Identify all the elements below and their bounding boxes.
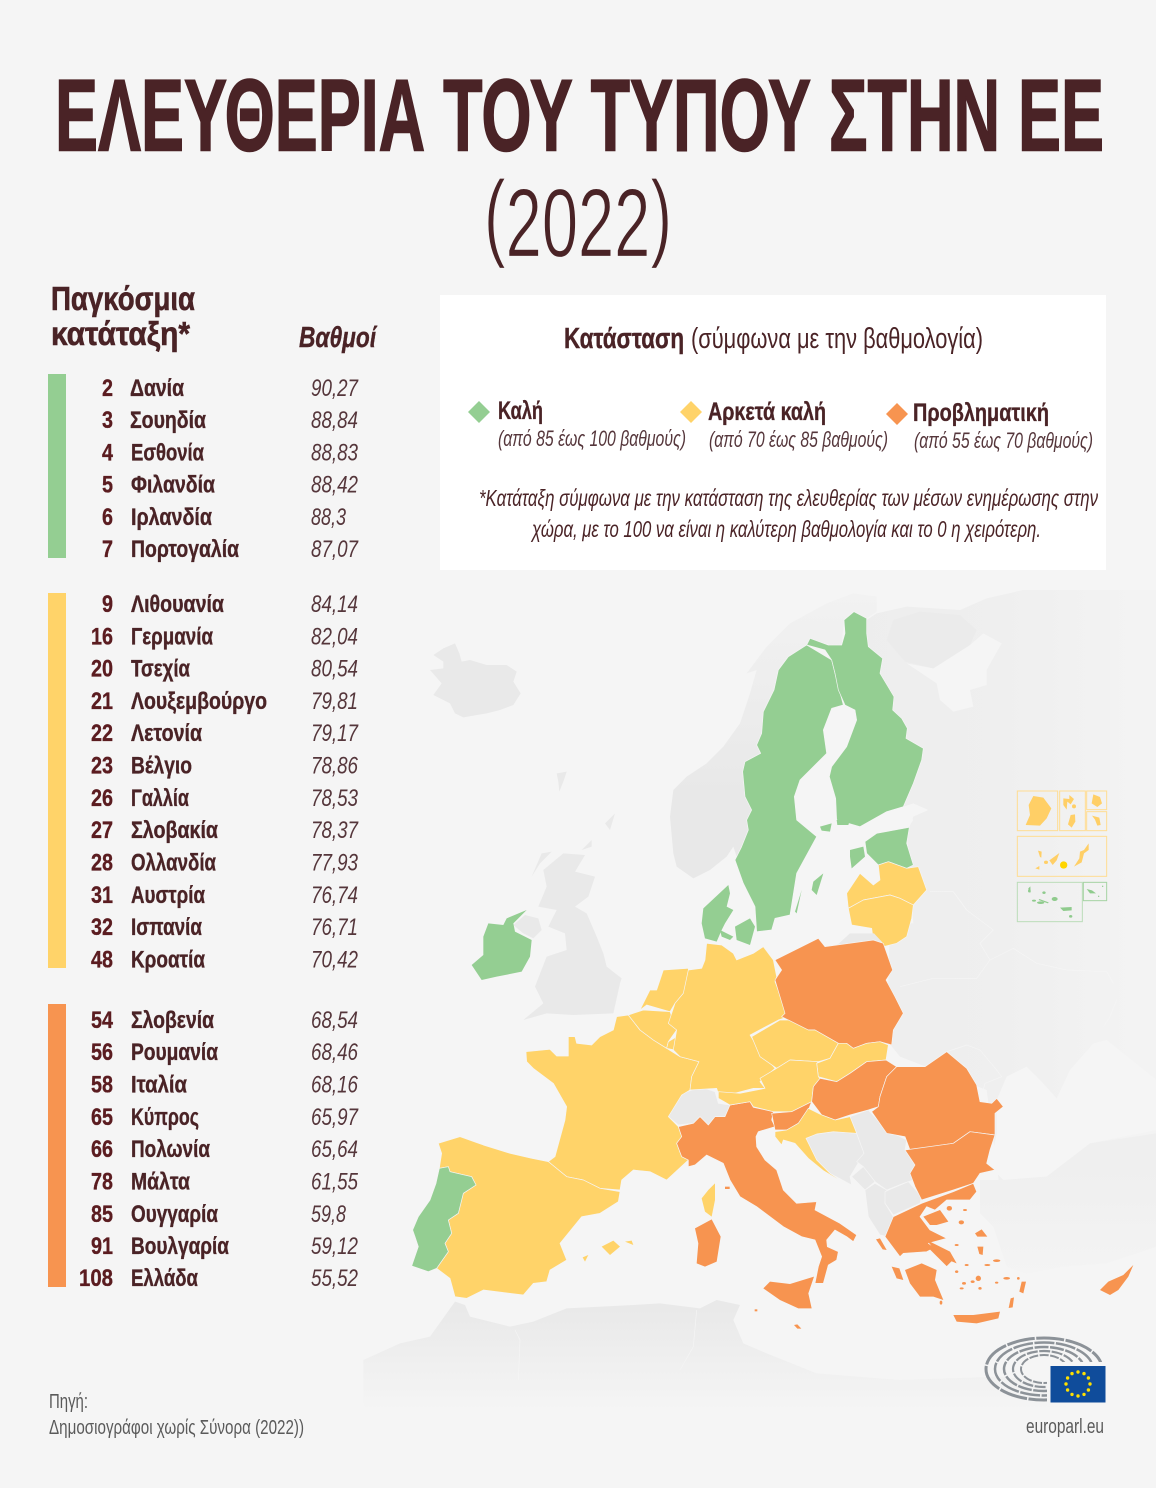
title bbox=[55, 58, 1104, 278]
legend heading bbox=[564, 323, 983, 355]
ranking group: fairly good: 22 bbox=[91, 720, 113, 747]
ranking group: fairly good: Λετονία bbox=[131, 720, 202, 747]
ranking group: fairly good bbox=[48, 591, 359, 974]
country: Spain bbox=[437, 1137, 620, 1298]
surrounding land: Black Sea and Turkey bbox=[947, 1000, 1156, 1273]
country: Corsica bbox=[702, 1183, 715, 1217]
legend item: fairly good: Αρκετά καλή bbox=[708, 398, 826, 426]
ranking group: good: 5 bbox=[102, 472, 113, 498]
ranking group: fairly good: 32 bbox=[91, 914, 113, 941]
ranking group: good: 3 bbox=[102, 407, 113, 434]
country: Romania bbox=[872, 1052, 1003, 1150]
ranking group: good: Ιρλανδία bbox=[131, 504, 212, 531]
inset: Canary Islands bbox=[1017, 836, 1107, 876]
country: Slovakia bbox=[817, 1042, 888, 1082]
island shapes yellow bbox=[1026, 794, 1102, 870]
ranking group: good bbox=[48, 374, 359, 563]
ranking group: fairly good: Λιθουανία bbox=[131, 591, 224, 618]
ranking group: problematic: 65,64 bbox=[311, 1136, 358, 1163]
Balearic Islands bbox=[583, 1241, 633, 1262]
ranking group: good: Δανία bbox=[130, 375, 184, 402]
island shapes green bbox=[1028, 886, 1103, 918]
legend item: fairly good bbox=[680, 398, 888, 452]
country: Malta bbox=[794, 1324, 801, 1329]
country: Finland bbox=[807, 612, 923, 827]
ranking group: fairly good: 70,42 bbox=[311, 946, 358, 974]
EU flag bbox=[1050, 1366, 1106, 1402]
country: Denmark bbox=[702, 885, 755, 945]
ranking group: good: Εσθονία bbox=[131, 440, 204, 466]
ranking group: good: 4 bbox=[102, 440, 114, 466]
ranking group: problematic: 65 bbox=[91, 1104, 113, 1131]
ranking group: good: 88,84 bbox=[311, 407, 358, 434]
ranking group: problematic: 78 bbox=[91, 1168, 113, 1196]
country: Sicily bbox=[763, 1277, 814, 1308]
ranking group: fairly good: 78,86 bbox=[311, 752, 359, 780]
country: Italy bbox=[677, 1102, 857, 1283]
ranking group: problematic: 85 bbox=[91, 1201, 113, 1228]
ranking group: good: 6 bbox=[102, 504, 113, 531]
ranking group: fairly good: Γερμανία bbox=[131, 624, 213, 650]
ranking group: problematic: Πολωνία bbox=[131, 1136, 210, 1163]
ranking group: problematic: 108 bbox=[79, 1265, 113, 1292]
legend item: fairly good: (από 70 έως 85 βαθμούς) bbox=[709, 427, 888, 452]
Kaliningrad bbox=[833, 933, 883, 947]
country: Croatia bbox=[775, 1108, 857, 1187]
map of Europe bbox=[363, 590, 1156, 1413]
country: Luxembourg bbox=[667, 1037, 678, 1051]
Italian small islands bbox=[725, 1187, 757, 1311]
ranking group: problematic: Σλοβενία bbox=[131, 1007, 214, 1034]
ranking group: good: 2 bbox=[102, 375, 113, 402]
ranking group: problematic: Ρουμανία bbox=[131, 1039, 218, 1066]
ranking group: good: Φιλανδία bbox=[131, 472, 215, 498]
country: Slovenia bbox=[772, 1102, 812, 1130]
ranking group: fairly good: Λουξεμβούργο bbox=[131, 688, 267, 715]
legend item: good bbox=[468, 397, 686, 451]
ranking group: fairly good: 82,04 bbox=[311, 624, 358, 650]
ranking group: fairly good: Βέλγιο bbox=[131, 752, 192, 780]
country: Latvia bbox=[847, 862, 927, 908]
column heading: world ranking: Παγκόσμια bbox=[51, 280, 195, 317]
ranking group: problematic: 68,46 bbox=[311, 1039, 359, 1066]
ranking group: fairly good: 79,17 bbox=[311, 720, 359, 747]
country: Austria bbox=[718, 1060, 820, 1112]
title: ( bbox=[484, 160, 506, 270]
country: Portugal bbox=[412, 1167, 476, 1272]
ranking group: fairly good: 23 bbox=[91, 752, 113, 780]
ranking group: fairly good: 79,81 bbox=[311, 688, 358, 715]
country: Greece bbox=[876, 1183, 1026, 1323]
website: europarl.eu bbox=[1026, 1416, 1104, 1438]
surrounding land: North Africa bbox=[363, 1300, 1067, 1413]
ranking group: good: Πορτογαλία bbox=[131, 536, 239, 563]
country: Bulgaria bbox=[905, 1132, 995, 1200]
ranking group: good: 90,27 bbox=[311, 375, 359, 402]
country: France bbox=[526, 1015, 699, 1190]
country: Estonia bbox=[795, 820, 913, 913]
ranking group: fairly good: Αυστρία bbox=[131, 882, 205, 909]
source note: Πηγή: bbox=[49, 1391, 88, 1413]
country: Poland bbox=[775, 938, 903, 1048]
ranking group: fairly good: 84,14 bbox=[311, 591, 358, 618]
ranking group: fairly good: 77,93 bbox=[311, 850, 359, 876]
ranking group: fairly good: 76,71 bbox=[311, 914, 358, 941]
ranking group: problematic: 59,12 bbox=[311, 1233, 358, 1260]
ranking group: problematic: 68,54 bbox=[311, 1007, 358, 1034]
legend heading: (σύμφωνα με την βαθμολογία) bbox=[691, 323, 983, 355]
ranking group: problematic: Ουγγαρία bbox=[131, 1201, 218, 1228]
surrounding land: eastern Europe bbox=[860, 590, 1156, 1190]
ranking group: fairly good: 28 bbox=[91, 850, 113, 876]
country: Lithuania bbox=[848, 895, 913, 947]
ranking group: problematic: 68,16 bbox=[311, 1072, 359, 1098]
country: Ireland bbox=[472, 910, 532, 980]
surrounding land: Balkans, Switzerland bbox=[667, 1087, 922, 1237]
country: Hungary bbox=[812, 1060, 897, 1120]
countries of Central and Eastern Europe bbox=[718, 938, 1133, 1329]
ranking group: good: 88,3 bbox=[311, 504, 346, 531]
legend item: problematic: Προβληματική bbox=[913, 399, 1049, 427]
ranking group: fairly good: 9 bbox=[102, 591, 113, 618]
ranking group: fairly good: 31 bbox=[91, 882, 113, 909]
ranking group: problematic: Ιταλία bbox=[131, 1072, 187, 1098]
ranking group: problematic: 55,52 bbox=[311, 1265, 358, 1292]
ranking group: fairly good: 80,54 bbox=[311, 656, 358, 682]
surrounding land: Iceland, Faroe, Britain bbox=[430, 643, 622, 1020]
legend heading: Κατάσταση bbox=[564, 323, 684, 355]
inset: Azores and Madeira bbox=[1017, 882, 1107, 922]
ranking group: good: 7 bbox=[102, 536, 113, 563]
ranking group: fairly good: Σλοβακία bbox=[131, 817, 218, 844]
surrounding land: Norway bbox=[670, 593, 877, 878]
ranking group: problematic: 59,8 bbox=[311, 1201, 346, 1228]
ranking group: fairly good: 27 bbox=[91, 817, 113, 844]
country: Sweden bbox=[735, 645, 843, 932]
column heading: world ranking: κατάταξη* bbox=[51, 315, 190, 352]
country: Cyprus bbox=[1100, 1265, 1133, 1295]
ranking group: problematic: 66 bbox=[91, 1136, 113, 1163]
ranking group: fairly good: 16 bbox=[91, 624, 113, 650]
legend item: good: (από 85 έως 100 βαθμούς) bbox=[498, 426, 686, 451]
ranking group: problematic: 56 bbox=[91, 1039, 113, 1066]
source note bbox=[49, 1391, 304, 1439]
country: Sardinia bbox=[695, 1219, 721, 1267]
ranking footnote bbox=[479, 485, 1098, 542]
ranking group: fairly good: Ολλανδία bbox=[131, 850, 216, 876]
ranking group: good: 88,42 bbox=[311, 472, 358, 498]
ranking group: problematic: 58 bbox=[91, 1072, 113, 1098]
ranking group: fairly good: 48 bbox=[91, 946, 113, 974]
country: Netherlands bbox=[640, 968, 688, 1012]
legend panel bbox=[440, 295, 1106, 570]
inset: French territories bbox=[1017, 791, 1107, 831]
ranking group: fairly good: Τσεχία bbox=[131, 656, 190, 682]
legend item: good: Καλή bbox=[498, 397, 543, 425]
ranking group: fairly good: 21 bbox=[91, 688, 113, 715]
ranking group: problematic: Μάλτα bbox=[131, 1168, 190, 1196]
ranking group: problematic: Ελλάδα bbox=[131, 1265, 198, 1292]
ranking group: good: 87,07 bbox=[311, 536, 359, 563]
title: 2022 bbox=[506, 168, 650, 278]
ranking group: fairly good: 78,53 bbox=[311, 785, 359, 812]
title: ) bbox=[650, 160, 672, 270]
column heading: points: Βαθμοί bbox=[299, 322, 378, 354]
source note: Δημοσιογράφοι χωρίς Σύνορα (2022)) bbox=[49, 1417, 304, 1439]
ranking group: fairly good: 20 bbox=[91, 656, 113, 682]
country: Germany bbox=[668, 943, 788, 1095]
ranking group: fairly good: 78,37 bbox=[311, 817, 359, 844]
ranking group: fairly good: Κροατία bbox=[131, 946, 205, 974]
European Parliament logo bbox=[986, 1338, 1109, 1406]
ranking group: problematic: 61,55 bbox=[311, 1168, 359, 1196]
ranking group: problematic: 91 bbox=[91, 1233, 113, 1260]
column heading: world ranking bbox=[51, 280, 195, 352]
ranking group: problematic: Βουλγαρία bbox=[131, 1233, 229, 1260]
ranking group: good: Σουηδία bbox=[130, 407, 206, 434]
ranking group: fairly good: 26 bbox=[91, 785, 113, 812]
legend item: problematic bbox=[886, 399, 1093, 453]
countries of Western Europe bbox=[412, 885, 857, 1311]
ranking group: fairly good: Γαλλία bbox=[131, 785, 189, 812]
ranking group: fairly good: Ισπανία bbox=[131, 914, 202, 941]
ranking group: problematic: 65,97 bbox=[311, 1104, 359, 1131]
country: Czechia bbox=[752, 1020, 838, 1068]
legend item: problematic: (από 55 έως 70 βαθμούς) bbox=[914, 428, 1093, 453]
ranking group: problematic bbox=[48, 1004, 359, 1292]
ranking group: good: 88,83 bbox=[311, 440, 359, 466]
hemicycle bbox=[986, 1338, 1102, 1400]
ranking group: problematic: 54 bbox=[91, 1007, 114, 1034]
inset boxes: outermost regions bbox=[1017, 791, 1107, 922]
ranking group: fairly good: 76,74 bbox=[311, 882, 358, 909]
ranking group: problematic: Κύπρος bbox=[131, 1104, 199, 1131]
country: Belgium bbox=[628, 1010, 677, 1048]
